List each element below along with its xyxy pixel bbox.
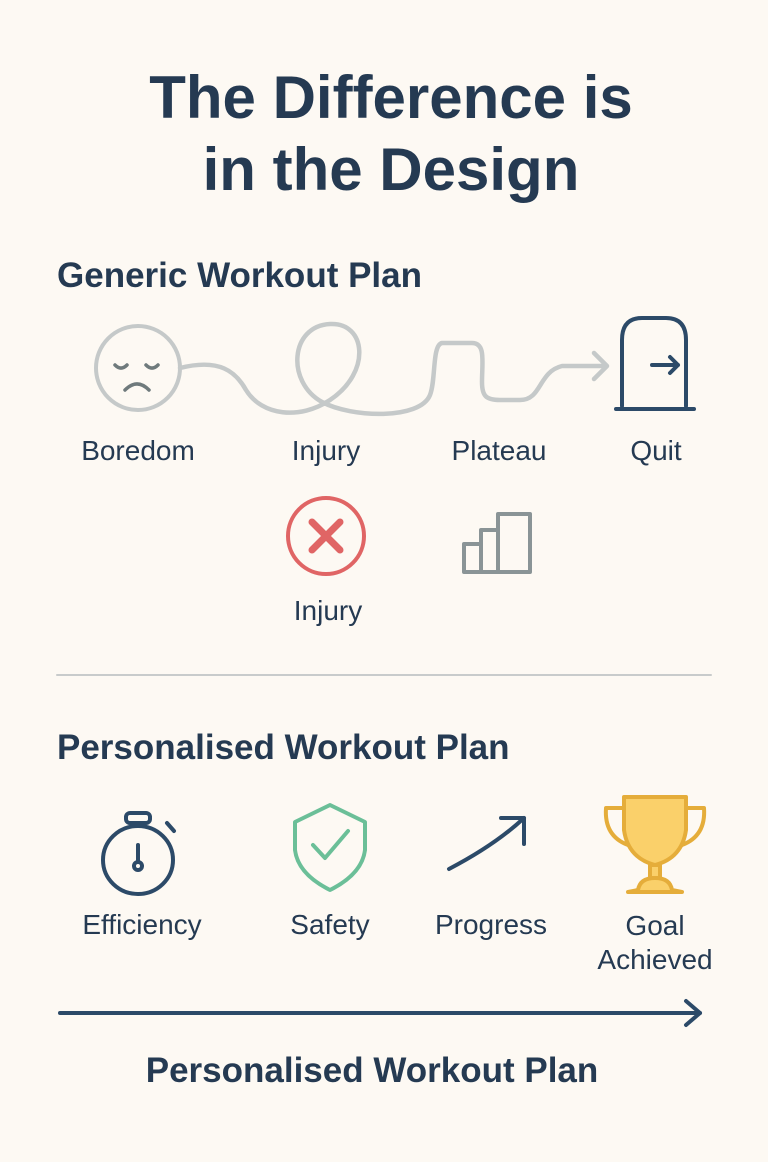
bottom caption: Personalised Workout Plan <box>146 1051 598 1090</box>
title: in the Design <box>203 136 579 203</box>
wavy path arrow <box>180 324 607 414</box>
title <box>149 64 633 203</box>
text: Injury <box>292 435 360 466</box>
bottom arrow <box>60 1001 700 1025</box>
heading: generic: Generic Workout Plan <box>57 256 422 295</box>
text: Goal <box>625 910 685 941</box>
icon: shield <box>295 805 365 890</box>
text: Plateau <box>452 435 546 466</box>
icon: trophy <box>606 797 704 892</box>
labels: personalised: Efficiency <box>82 909 202 940</box>
icon: door <box>616 318 694 409</box>
icon: progress arrow <box>449 818 524 869</box>
icon: bar chart <box>464 514 530 572</box>
text: Achieved <box>597 944 713 975</box>
icon: sad face <box>96 326 180 410</box>
heading: personalised: Personalised Workout Plan <box>57 728 510 767</box>
title: The Difference is <box>149 64 633 131</box>
text: Progress <box>435 909 547 940</box>
icon: injury X <box>288 498 364 574</box>
icon: stopwatch <box>103 813 174 894</box>
label: injury below: Injury <box>294 595 362 626</box>
text: Quit <box>630 435 682 466</box>
divider <box>57 674 711 676</box>
labels: generic: Boredom <box>81 435 195 466</box>
text: Safety <box>290 909 370 940</box>
